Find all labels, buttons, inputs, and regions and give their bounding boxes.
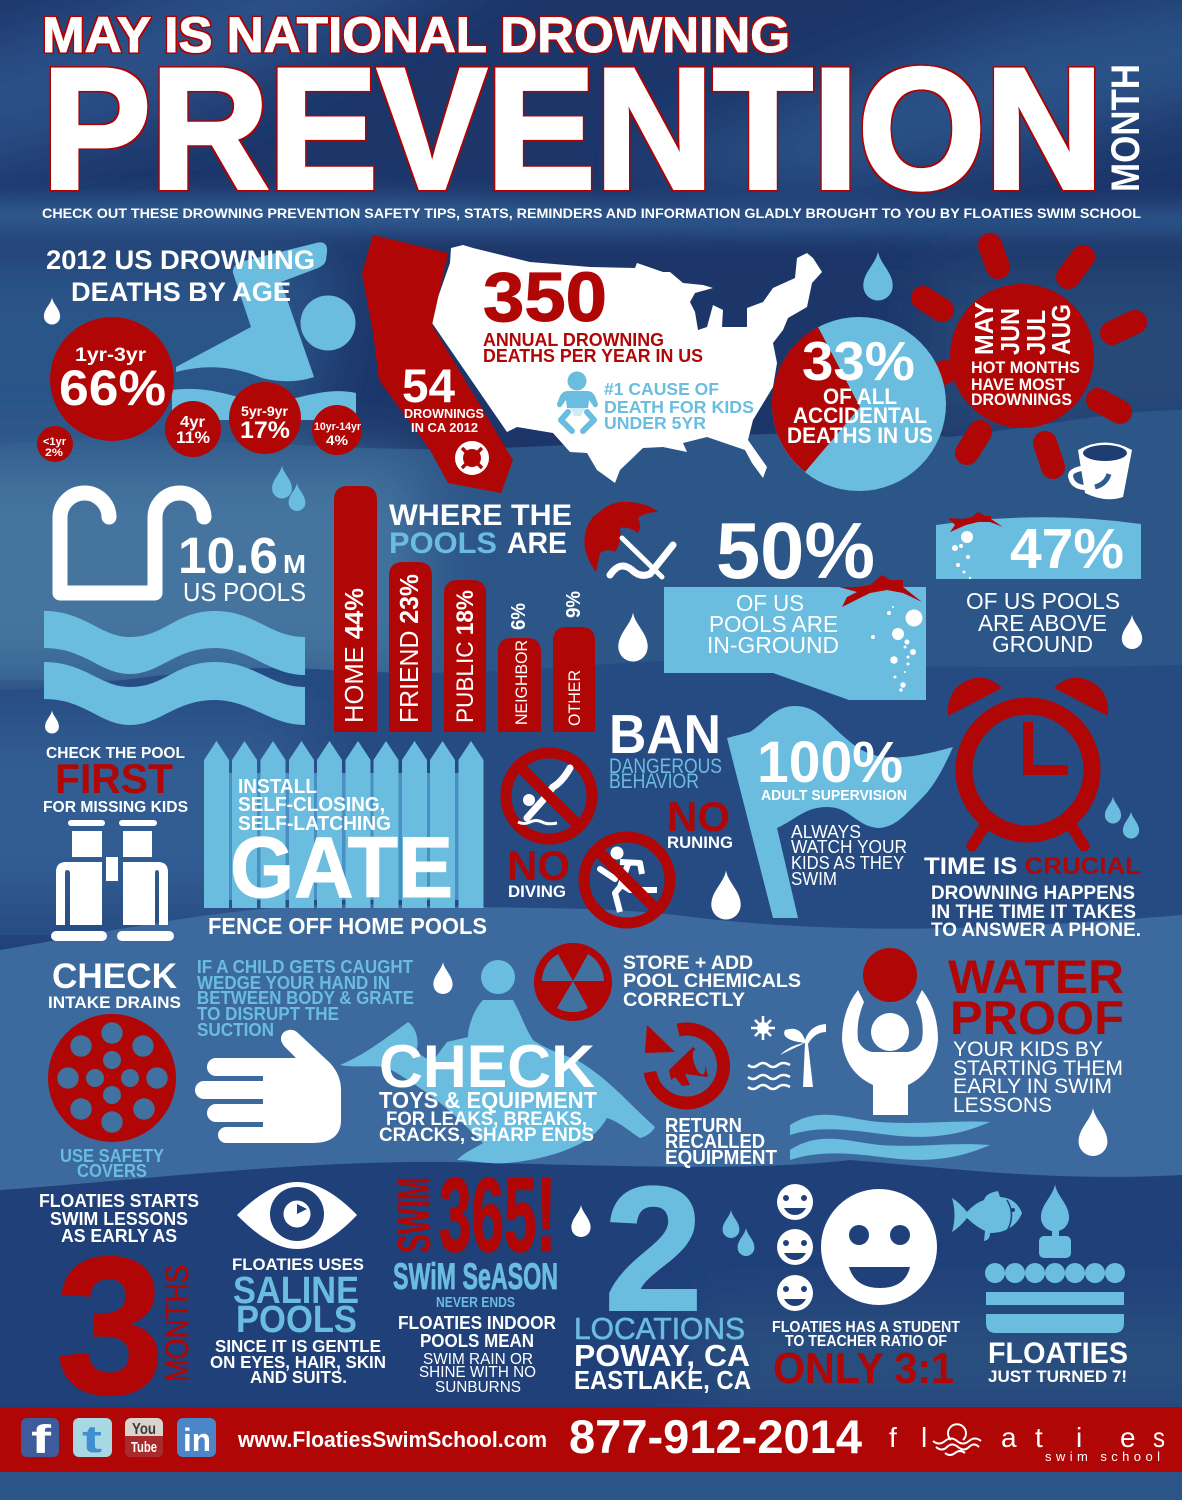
bubble: 10yr-14yr 4%: 4% — [326, 432, 349, 448]
bar chart — [334, 486, 595, 732]
text: floaties starts: AS EARLY AS — [61, 1226, 177, 1246]
logo: floaties swim school: f — [889, 1422, 897, 1453]
text: always watch: SWIM — [791, 868, 837, 889]
icon: water drop — [44, 298, 60, 324]
icon: water drop — [863, 252, 893, 300]
bar: friend 23%: FRIEND 23% — [394, 574, 424, 723]
logo: floaties swim school: l — [921, 1422, 927, 1453]
text: locations: POWAY, CA — [574, 1338, 750, 1373]
label: above ground: OF US POOLS — [966, 588, 1120, 614]
bar: public 18% — [444, 580, 486, 732]
months text: DROWNINGS — [971, 390, 1072, 409]
logo: floaties swim school: e — [1120, 1422, 1136, 1453]
bar: neighbor 6%: NEIGHBOR — [512, 640, 531, 725]
text: indoor pools: SWIM RAIN OR — [423, 1351, 533, 1368]
text: floaties just turned 7 — [988, 1337, 1128, 1386]
heading: ban — [609, 703, 722, 793]
months text: MAY — [971, 302, 999, 355]
text: your kids: STARTING THEM — [953, 1057, 1123, 1080]
bar: neighbor 6%: 6% — [508, 603, 530, 630]
logo: floaties swim school: i — [1076, 1422, 1082, 1453]
title word: prevention: PREVENTION — [42, 33, 1103, 225]
icon: swimmer — [172, 242, 356, 420]
icon: drain cover — [48, 1014, 176, 1142]
title word: month: MONTH — [1104, 64, 1148, 192]
bubble: 1yr-3yr 66%: 66% — [59, 360, 166, 416]
months text: HOT MONTHS — [971, 358, 1080, 377]
title — [42, 7, 1148, 225]
text: indoor pools: SUNBURNS — [435, 1379, 521, 1396]
panel: deaths by age — [37, 242, 362, 462]
icon: smileys — [777, 1184, 937, 1311]
panel: US map — [362, 235, 822, 493]
icon: pool ladder — [60, 493, 204, 593]
bubble: under 1yr 2%: <1yr — [43, 436, 67, 448]
text: store chemicals — [623, 952, 801, 1011]
text: store chemicals: POOL CHEMICALS — [623, 970, 801, 992]
text: website: www.FloatiesSwimSchool.com — [237, 1427, 547, 1452]
stat: 10.6M: 10.6 — [178, 527, 278, 584]
pie text: 33% — [802, 330, 915, 392]
icon: youtube — [125, 1418, 163, 1457]
bar: other 9% — [553, 591, 595, 732]
panel: 47 percent above ground — [936, 512, 1141, 657]
bubble: 5yr-9yr 17%: 17% — [240, 417, 290, 444]
text: check toys — [379, 1033, 597, 1146]
logo: floaties swim school: t — [1035, 1422, 1043, 1453]
heading: ban: DANGEROUS — [609, 755, 722, 778]
text: no running: NO — [667, 793, 730, 840]
icon: fence — [204, 741, 484, 908]
panel: floaties just turned 7 — [985, 1184, 1128, 1386]
icon: red swimmer — [839, 575, 922, 607]
panel: student teacher ratio — [772, 1184, 960, 1393]
bar: other 9%: 9% — [563, 591, 585, 618]
icon: hand — [195, 1030, 341, 1143]
icon: facebook: f — [31, 1418, 52, 1462]
panel: pool chemicals — [534, 943, 801, 1021]
heading: water proof — [948, 950, 1124, 1044]
icon: flag — [727, 706, 953, 918]
icon: eye — [237, 1182, 357, 1249]
text: time is crucial: TIME IS CRUCIAL — [924, 853, 1141, 880]
logo: swim 365: SWIM — [388, 1177, 440, 1253]
text: check toys: TOYS & EQUIPMENT — [379, 1087, 597, 1113]
pie text: ACCIDENTAL — [793, 403, 927, 428]
icon: linkedin — [177, 1418, 216, 1458]
text: store chemicals: CORRECTLY — [623, 989, 745, 1011]
text: no diving: DIVING — [508, 883, 566, 901]
text: use safety covers: USE SAFETY — [60, 1145, 165, 1166]
icon: water drop — [433, 962, 453, 994]
text: locations: LOCATIONS — [574, 1311, 745, 1346]
text: your kids: LESSONS — [953, 1094, 1052, 1117]
title line: may is national drowning: MAY IS NATIONAL DROWNING — [42, 7, 790, 63]
bubble: 5yr-9yr 17% — [229, 382, 301, 454]
heading: where the pools are: WHERE THE — [389, 499, 572, 532]
bubble: 4yr 11%: 11% — [176, 428, 210, 447]
text: store chemicals: STORE + ADD — [623, 952, 753, 974]
panel: where the pools are — [334, 486, 595, 732]
text: floaties starts: FLOATIES STARTS — [39, 1191, 199, 1211]
text: indoor pools — [398, 1313, 556, 1396]
icon: twitter — [73, 1418, 112, 1461]
icon: water drop — [571, 1205, 591, 1237]
text: if a child gets caught — [197, 957, 414, 1040]
text: indoor pools: POOLS MEAN — [420, 1331, 534, 1351]
panel: ban dangerous behavior — [506, 703, 733, 923]
heading: ban: BEHAVIOR — [609, 770, 699, 793]
bubble: under 1yr 2% — [37, 426, 73, 462]
panel: check intake drains — [48, 957, 414, 1181]
text: your kids: YOUR KIDS BY — [953, 1038, 1103, 1061]
bubble: 4yr 11%: 4yr — [180, 414, 205, 431]
text: return recalled: RECALLED — [665, 1131, 765, 1153]
text: check intake drains: CHECK — [52, 957, 177, 996]
text: if a child gets caught: IF A CHILD GETS CAUGHT — [197, 957, 413, 977]
text: locations — [574, 1311, 751, 1395]
label: months: MONTHS — [159, 1265, 195, 1382]
text: check intake drains — [48, 957, 181, 1012]
map: united states — [430, 245, 822, 483]
stat: 54 drownings in CA: DROWNINGS — [404, 406, 484, 421]
text: check the pool first: FIRST — [55, 755, 173, 802]
icon: recall arrow and megaphone — [645, 1025, 724, 1103]
text: locations: EASTLAKE, CA — [574, 1365, 751, 1395]
icon: youtube: Tube — [131, 1439, 157, 1456]
icon: umbrella and beach chair — [584, 502, 673, 577]
stat: 47%: 47% — [1010, 517, 1124, 581]
heading: ban: BAN — [609, 703, 721, 765]
panel: 3 months — [39, 1191, 199, 1435]
stat: 350 deaths: DEATHS PER YEAR IN US — [483, 345, 703, 366]
text: check the pool first: CHECK THE POOL — [46, 745, 185, 762]
icon: water drops — [272, 466, 305, 511]
icon: life ring — [459, 445, 485, 471]
stat: 54 drownings in CA — [402, 359, 484, 435]
text: return recalled: RETURN — [665, 1115, 742, 1137]
text: check toys: FOR LEAKS, BREAKS, — [386, 1109, 587, 1130]
label: above ground: GROUND — [992, 631, 1093, 657]
icon: binoculars — [51, 820, 174, 941]
bar: home 44% — [334, 486, 377, 732]
icon: twitter: t — [82, 1419, 103, 1461]
icon: water drop — [1122, 615, 1142, 649]
text: install gate: SELF-LATCHING — [238, 813, 391, 835]
text: floaties just turned 7: FLOATIES — [988, 1337, 1128, 1370]
icon: water drop — [45, 710, 59, 734]
footer bar — [0, 1407, 1182, 1472]
text: install gate: INSTALL — [238, 776, 317, 798]
panel: sun hot months — [923, 245, 1135, 467]
logo: swim season — [393, 1256, 558, 1311]
icon: facebook — [21, 1418, 59, 1462]
text: saline pools: SALINE — [233, 1270, 359, 1312]
text: check the pool first — [43, 745, 188, 816]
stat: 3: 3 — [56, 1217, 164, 1435]
text: check intake drains: INTAKE DRAINS — [48, 993, 181, 1012]
logo: swim 365 — [388, 1157, 556, 1274]
panel: time is crucial — [924, 678, 1141, 941]
icon: fish — [952, 1191, 1022, 1241]
text: ratio: ONLY 3:1 — [773, 1344, 954, 1393]
icon: sun — [923, 245, 1135, 467]
icon: water drops — [723, 1210, 754, 1256]
stat: 54 drownings in CA: IN CA 2012 — [411, 420, 478, 435]
text: install gate — [230, 776, 453, 916]
text: indoor pools: SHINE WITH NO — [419, 1364, 536, 1381]
pie text: DEATHS IN US — [787, 423, 933, 448]
icon: bubbles — [952, 531, 973, 579]
stat: 100%: ADULT SUPERVISION — [761, 787, 907, 804]
stat: 54 drownings in CA: 54 — [402, 359, 455, 412]
logo: swim 365: 365! — [439, 1157, 556, 1274]
text: always watch — [791, 821, 907, 889]
heading: where the pools are: ARE — [507, 527, 567, 560]
text: ratio: TO TEACHER RATIO OF — [785, 1333, 947, 1350]
text: always watch: KIDS AS THEY — [791, 852, 904, 873]
icon: waves — [790, 1115, 990, 1160]
text: use safety covers — [60, 1145, 165, 1181]
text: drowning happens — [931, 882, 1141, 941]
label: above ground — [966, 588, 1120, 657]
label: fence off home pools: FENCE OFF HOME POOLS — [208, 913, 487, 939]
heading: deaths by age: 2012 US DROWNING — [46, 245, 315, 275]
bar: other 9%: OTHER — [565, 670, 584, 726]
icon: birthday cake — [985, 1184, 1125, 1333]
panel: 33 percent pie — [772, 317, 946, 491]
text: always watch: ALWAYS — [791, 821, 861, 842]
text: if a child gets caught: WEDGE YOUR HAND IN — [197, 973, 390, 993]
heading: where the pools are: POOLS — [389, 527, 497, 560]
text: drowning happens: DROWNING HAPPENS — [931, 882, 1135, 904]
stat: number one cause: UNDER 5YR — [604, 413, 706, 433]
map: california — [362, 235, 513, 493]
label: in-ground: OF US — [736, 590, 804, 616]
heading: where the pools are — [389, 499, 572, 560]
text: drowning happens: IN THE TIME IT TAKES — [931, 901, 1136, 923]
text: floaties just turned 7: JUST TURNED 7! — [988, 1367, 1127, 1386]
pie text: OF ALL — [823, 384, 897, 409]
bubble: 1yr-3yr 66%: 1yr-3yr — [75, 345, 147, 366]
icon: radiation hazard — [534, 943, 612, 1021]
text: always watch: WATCH YOUR — [791, 836, 907, 857]
months text — [971, 302, 1080, 409]
logo: swim season: NEVER ENDS — [436, 1294, 515, 1311]
panel: swim 365 — [388, 1157, 558, 1396]
stat: 350 deaths: ANNUAL DROWNING — [483, 329, 664, 350]
text: if a child gets caught: SUCTION — [197, 1020, 274, 1040]
text: saline pools: AND SUITS. — [250, 1367, 347, 1387]
bubble: 10yr-14yr 4%: 10yr-14yr — [314, 421, 362, 433]
panel: saline pools — [210, 1182, 386, 1387]
months text: HAVE MOST — [971, 375, 1066, 394]
icon: no running — [584, 837, 670, 923]
label: in-ground: POOLS ARE — [709, 611, 838, 637]
text: install gate: GATE — [230, 820, 453, 916]
icon: youtube: You — [132, 1421, 156, 1438]
text: return recalled — [665, 1115, 777, 1169]
text: install gate: SELF-CLOSING, — [238, 794, 385, 816]
stat: 2: 2 — [604, 1150, 703, 1348]
text: drowning happens: TO ANSWER A PHONE. — [931, 919, 1141, 941]
months text: JUL — [1023, 310, 1051, 355]
icon: child with ball — [842, 948, 938, 1115]
subtitle: CHECK OUT THESE DROWNING PREVENTION SAFETY TIPS, STATS, REMINDERS AND INFORMATION GLADLY BROUGHT TO YOU BY FLOATIES SWIM SCHOOL — [42, 206, 1141, 221]
icon: red swimmer — [948, 512, 1003, 532]
logo: floaties swim school: swim school — [1045, 1449, 1160, 1464]
icon: bucket — [1071, 442, 1132, 499]
text: saline pools: FLOATIES USES — [232, 1255, 364, 1274]
bubble: 10yr-14yr 4% — [312, 405, 362, 455]
stat: number one cause — [604, 379, 754, 433]
heading: water proof: WATER — [948, 950, 1124, 1003]
label: above ground: ARE ABOVE — [978, 610, 1107, 636]
panel: 2 locations — [574, 1150, 754, 1395]
months text: JUN — [997, 308, 1025, 355]
stat: 350 deaths — [483, 258, 703, 366]
icon: palm tree and sun — [748, 1016, 826, 1089]
icon: child on dolphin — [340, 960, 655, 1163]
heading: water proof: PROOF — [950, 991, 1124, 1044]
text: check toys: CRACKS, SHARP ENDS — [379, 1125, 594, 1146]
text: saline pools: POOLS — [236, 1299, 357, 1341]
label: in-ground: IN-GROUND — [707, 632, 839, 658]
panel: 10.6M pools — [44, 493, 306, 725]
text: ratio: FLOATIES HAS A STUDENT — [772, 1319, 960, 1336]
text: check the pool first: FOR MISSING KIDS — [43, 799, 188, 816]
text: phone number: 877-912-2014 — [569, 1410, 862, 1463]
text: your kids — [953, 1038, 1123, 1117]
panel: return recalled equipment — [645, 1025, 777, 1169]
panel: fence and gate — [204, 741, 487, 939]
icon: linkedin: in — [183, 1422, 211, 1458]
icon: water drop — [711, 870, 741, 920]
bar: friend 23% — [389, 562, 432, 732]
label: us pools: US POOLS — [183, 577, 306, 607]
text: use safety covers: COVERS — [77, 1160, 147, 1181]
logo: swim season: SWiM SeASON — [393, 1256, 558, 1297]
stat: 100%: 100% — [757, 730, 903, 795]
bar: home 44%: HOME 44% — [339, 588, 369, 723]
heading: deaths by age: DEATHS BY AGE — [71, 277, 291, 307]
stat: 350 deaths: 350 — [483, 258, 607, 336]
label: in-ground — [707, 590, 839, 658]
text: saline pools: SINCE IT IS GENTLE — [215, 1336, 381, 1356]
logo: floaties swim school — [889, 1422, 1165, 1464]
text: indoor pools: FLOATIES INDOOR — [398, 1313, 556, 1333]
panel: check toys and equipment — [340, 960, 655, 1163]
bubble: 5yr-9yr 17%: 5yr-9yr — [241, 403, 289, 419]
text: no diving: NO — [507, 842, 570, 889]
in-ground pool shape — [664, 587, 926, 700]
icon: bubbles — [871, 606, 922, 692]
bubble: under 1yr 2%: 2% — [45, 447, 63, 459]
bar: public 18%: PUBLIC 18% — [452, 590, 479, 723]
bubble: 4yr 11% — [165, 401, 221, 457]
panel: waterproof — [790, 948, 1124, 1160]
pie text — [787, 330, 933, 448]
logo: floaties swim school: s — [1153, 1422, 1165, 1453]
panel: check the pool first — [43, 745, 188, 941]
text: no running: RUNING — [667, 833, 733, 852]
text: floaties starts: SWIM LESSONS — [50, 1209, 188, 1229]
text: ratio — [772, 1319, 960, 1393]
above-ground pool shape — [936, 517, 1141, 579]
icon: no diving — [506, 753, 592, 839]
panel: adult supervision flag — [727, 706, 953, 918]
text: if a child gets caught: BETWEEN BODY & GRATE — [197, 988, 414, 1008]
stat: number one cause: #1 CAUSE OF — [604, 379, 719, 399]
text: your kids: EARLY IN SWIM — [953, 1075, 1112, 1098]
bubble: 1yr-3yr 66% — [50, 317, 174, 441]
icon: waves — [44, 611, 305, 725]
stat: 10.6M: M — [283, 549, 306, 579]
panel: 50 percent in-ground — [664, 506, 926, 700]
text: if a child gets caught: TO DISRUPT THE — [197, 1004, 339, 1024]
icon: water drops — [1105, 796, 1139, 838]
text: floaties starts — [39, 1191, 199, 1246]
icon: alarm clock — [948, 678, 1108, 846]
stat: 50%: 50% — [716, 506, 875, 595]
text: return recalled: EQUIPMENT — [665, 1147, 777, 1169]
text: saline pools: ON EYES, HAIR, SKIN — [210, 1352, 386, 1372]
text: saline pools — [210, 1255, 386, 1387]
pie chart — [772, 317, 946, 491]
heading: deaths by age — [46, 245, 315, 307]
icon: baby — [557, 372, 598, 431]
icon: water drop — [618, 612, 648, 662]
logo: floaties swim school: a — [1001, 1422, 1017, 1453]
stat: number one cause: DEATH FOR KIDS — [604, 397, 754, 417]
text: check toys: CHECK — [379, 1033, 595, 1100]
icon: water drop — [1079, 1108, 1107, 1156]
bar: neighbor 6% — [498, 603, 541, 732]
months text: AUG — [1048, 304, 1076, 355]
